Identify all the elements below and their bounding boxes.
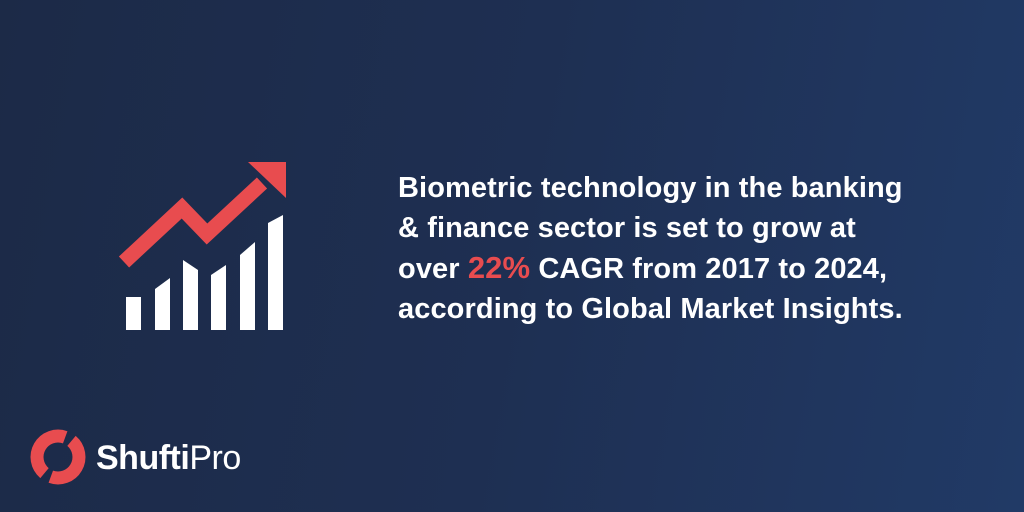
- wordmark: ShuftiPro: [96, 439, 241, 477]
- arrow: [124, 162, 286, 262]
- text block: statistic: & finance sector is set to grow at: [398, 212, 856, 244]
- text block: statistic: Biometric technology in the banking: [398, 172, 903, 204]
- bars: [126, 215, 283, 330]
- text block: statistic: over 22% CAGR from 2017 to 2024,: [398, 250, 887, 285]
- icon: ring: [37, 436, 79, 478]
- icon: growth chart: [119, 162, 286, 330]
- text block: statistic: [398, 172, 903, 325]
- text block: statistic: according to Global Market Insights.: [398, 293, 903, 325]
- logo: ShuftiPro: [30, 430, 241, 484]
